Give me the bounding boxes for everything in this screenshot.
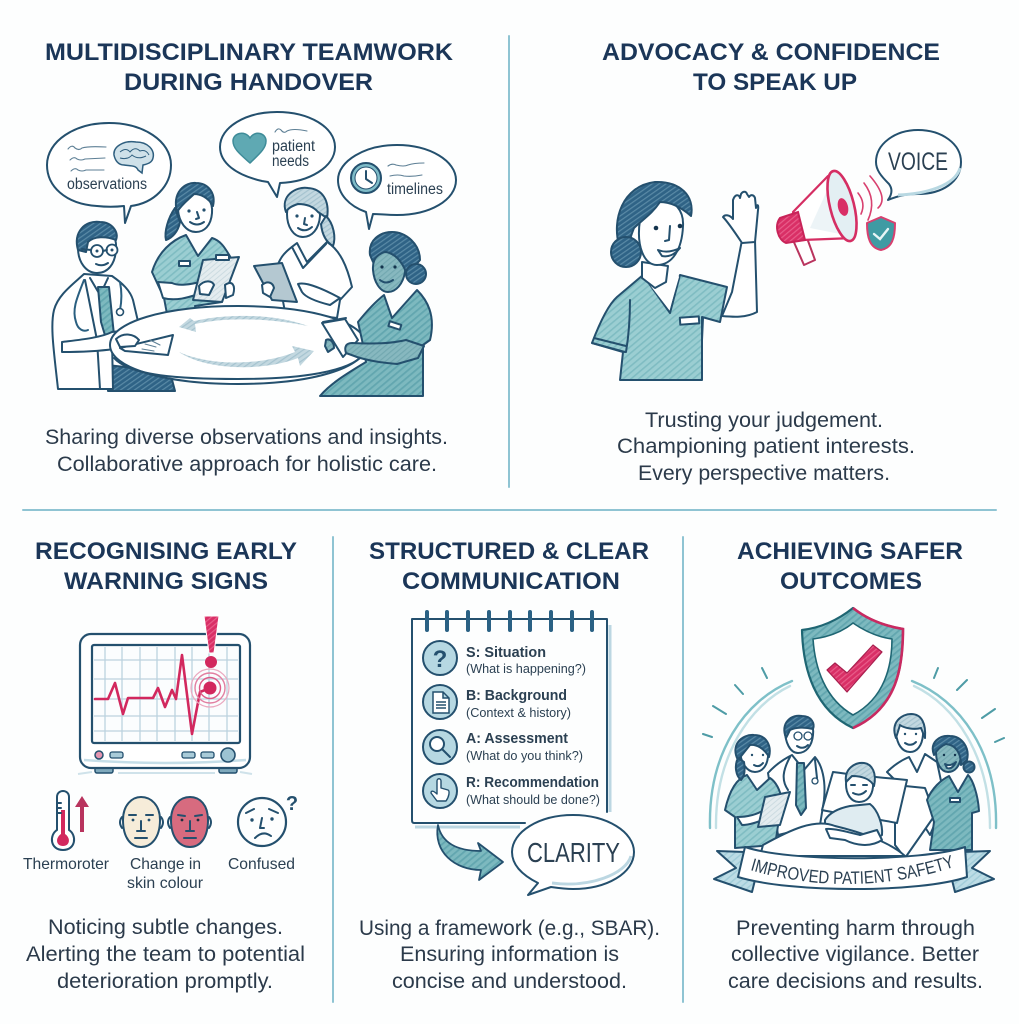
icon: patient monitor — [78, 616, 252, 774]
speech bubble: patient needs: needs — [272, 153, 309, 170]
SBAR: situation: (What is happening?) — [466, 661, 586, 676]
round table with arrows — [110, 306, 366, 384]
SBAR: recommendation: R: Recommendation — [466, 775, 599, 791]
heading: structured: STRUCTURED & CLEAR — [369, 538, 649, 565]
figure: back carer — [887, 714, 945, 835]
speech bubble: clarity: CLARITY — [527, 837, 620, 868]
caption: Sharing diverse observations and insights. — [45, 425, 448, 449]
heading: advocacy: TO SPEAK UP — [693, 69, 857, 96]
figure: nurse raising hand — [592, 182, 758, 380]
caption: Noticing subtle changes. — [48, 915, 283, 939]
notebook: SBAR framework — [412, 612, 610, 827]
caption: Trusting your judgement. — [645, 408, 883, 432]
icon labels — [23, 856, 295, 892]
panel: multidisciplinary teamwork — [45, 39, 456, 476]
figure: nurse with tablet — [254, 188, 352, 318]
panel: safer outcomes — [702, 538, 1005, 993]
radiating arcs and rays — [703, 668, 1004, 828]
SBAR: assessment: A: Assessment — [466, 731, 568, 747]
caption: concise and understood. — [392, 969, 627, 993]
heading: early warning: RECOGNISING EARLY — [35, 538, 297, 565]
SBAR: situation: S: Situation — [466, 645, 546, 661]
SBAR: recommendation — [423, 774, 600, 808]
icon labels: Change in — [130, 856, 201, 873]
icon: confused face — [238, 793, 298, 846]
banner: improved patient safety: IMPROVED PATIENT SAFETY — [751, 855, 951, 884]
icon: shield badge — [867, 217, 895, 250]
SBAR: situation — [423, 641, 586, 676]
heading: advocacy: ADVOCACY & CONFIDENCE — [602, 39, 940, 66]
SBAR: recommendation: (What should be done?) — [466, 792, 600, 807]
figure: nurse with notepad — [320, 232, 432, 396]
speech bubble: patient needs — [220, 112, 335, 197]
banner: improved patient safety — [713, 846, 995, 893]
SBAR: assessment: (What do you think?) — [466, 748, 583, 763]
icon: thermometer with arrow — [52, 791, 89, 850]
icon: exclamation mark — [204, 616, 219, 668]
caption: Preventing harm through — [736, 916, 975, 940]
caption: Championing patient interests. — [617, 434, 915, 458]
figure: doctor — [52, 222, 175, 391]
speech bubble: observations: observations — [67, 176, 147, 193]
caption: collective vigilance. Better — [731, 942, 979, 966]
caption: Collaborative approach for holistic care. — [57, 452, 437, 476]
caption: deterioration promptly. — [57, 969, 273, 993]
icon: face pale — [120, 797, 163, 847]
SBAR: background: B: Background — [466, 688, 567, 704]
caption: Using a framework (e.g., SBAR). — [359, 916, 660, 940]
panel: early warning signs — [23, 538, 305, 993]
speech bubble: timelines — [338, 145, 456, 229]
caption: Alerting the team to potential — [26, 942, 305, 966]
icon: confused face: ? — [286, 793, 298, 815]
SBAR: background — [423, 685, 571, 720]
icon: megaphone — [777, 168, 882, 265]
icon: face flushed — [168, 797, 211, 847]
figure: nurse left — [725, 735, 790, 848]
arrow: to clarity — [437, 825, 503, 880]
icon labels: Confused — [228, 856, 295, 873]
figure: doctor — [768, 716, 825, 835]
panel: structured communication — [359, 538, 660, 993]
speech bubble: patient needs: patient — [272, 138, 316, 155]
heading: structured: COMMUNICATION — [402, 568, 620, 595]
icon labels: skin colour — [127, 875, 204, 892]
figure: nurse with clipboard — [152, 183, 239, 314]
heading: multidisciplinary teamwork: DURING HANDOVER — [124, 69, 373, 96]
heading: multidisciplinary teamwork: MULTIDISCIPLINARY TEAMWORK — [45, 39, 453, 66]
SBAR: assessment — [423, 730, 583, 764]
heading: safer outcomes: OUTCOMES — [780, 568, 922, 595]
speech bubble: voice: VOICE — [888, 148, 948, 176]
speech bubble: observations — [47, 123, 171, 223]
heading: early warning: WARNING SIGNS — [64, 568, 268, 595]
figure: patient in bed — [760, 763, 935, 858]
icon: shield with check — [802, 608, 903, 728]
caption: Every perspective matters. — [638, 461, 890, 485]
caption: Ensuring information is — [400, 942, 619, 966]
SBAR: background: (Context & history) — [466, 705, 571, 720]
figure: nurse right — [927, 736, 979, 850]
icon labels: Thermoroter — [23, 856, 110, 873]
speech bubble: voice — [876, 130, 961, 200]
panel: advocacy and confidence — [592, 39, 961, 485]
caption: care decisions and results. — [728, 969, 983, 993]
SBAR: situation: ? — [433, 646, 447, 673]
speech bubble: timelines: timelines — [387, 181, 443, 198]
heading: safer outcomes: ACHIEVING SAFER — [737, 538, 963, 565]
speech bubble: clarity — [512, 815, 634, 895]
